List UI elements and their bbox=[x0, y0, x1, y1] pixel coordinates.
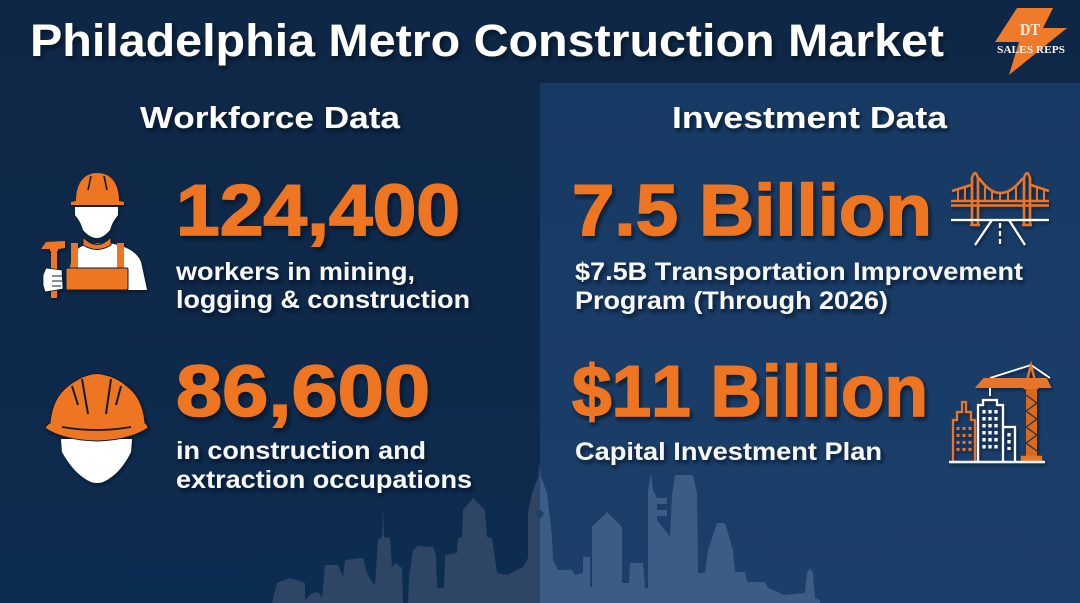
text: workers description: workers in mining, bbox=[175, 258, 415, 286]
heading: workforce data: Workforce Data bbox=[140, 100, 401, 135]
text: occupations description: in construction and bbox=[176, 437, 426, 465]
logo: DT bbox=[1020, 20, 1041, 39]
logo: SALES REPS bbox=[997, 45, 1065, 56]
text: occupations description: extraction occupations bbox=[176, 466, 472, 494]
skyline right half bbox=[540, 470, 820, 603]
stat: 124,400: 124,400 bbox=[176, 171, 460, 251]
stat: 7.5 Billion: 7.5 Billion bbox=[572, 171, 932, 251]
text: capital plan description: Capital Investment Plan bbox=[575, 438, 882, 466]
skyline left half bbox=[272, 463, 540, 603]
icon: hard hat and head bbox=[45, 374, 148, 483]
icon: bridge bbox=[951, 173, 1049, 245]
title: Philadelphia Metro Construction Market bbox=[30, 15, 944, 66]
stat: 86,600: 86,600 bbox=[176, 352, 430, 432]
text: transportation description: $7.5B Transportation Improvement bbox=[575, 258, 1024, 286]
panel: investment data background bbox=[540, 83, 1080, 603]
skyline clock bbox=[536, 510, 544, 518]
logo bbox=[995, 8, 1067, 75]
text: workers description bbox=[175, 258, 470, 314]
text: transportation description bbox=[575, 258, 1024, 315]
stat: 11 Billion: $11 Billion bbox=[572, 352, 928, 432]
text: transportation description: Program (Through 2026) bbox=[575, 287, 888, 315]
heading: investment data: Investment Data bbox=[672, 100, 948, 135]
icon: worker with hammer bbox=[41, 173, 147, 298]
text: occupations description bbox=[176, 437, 472, 494]
icon: crane and buildings bbox=[949, 365, 1050, 462]
text: workers description: logging & construction bbox=[176, 286, 470, 314]
